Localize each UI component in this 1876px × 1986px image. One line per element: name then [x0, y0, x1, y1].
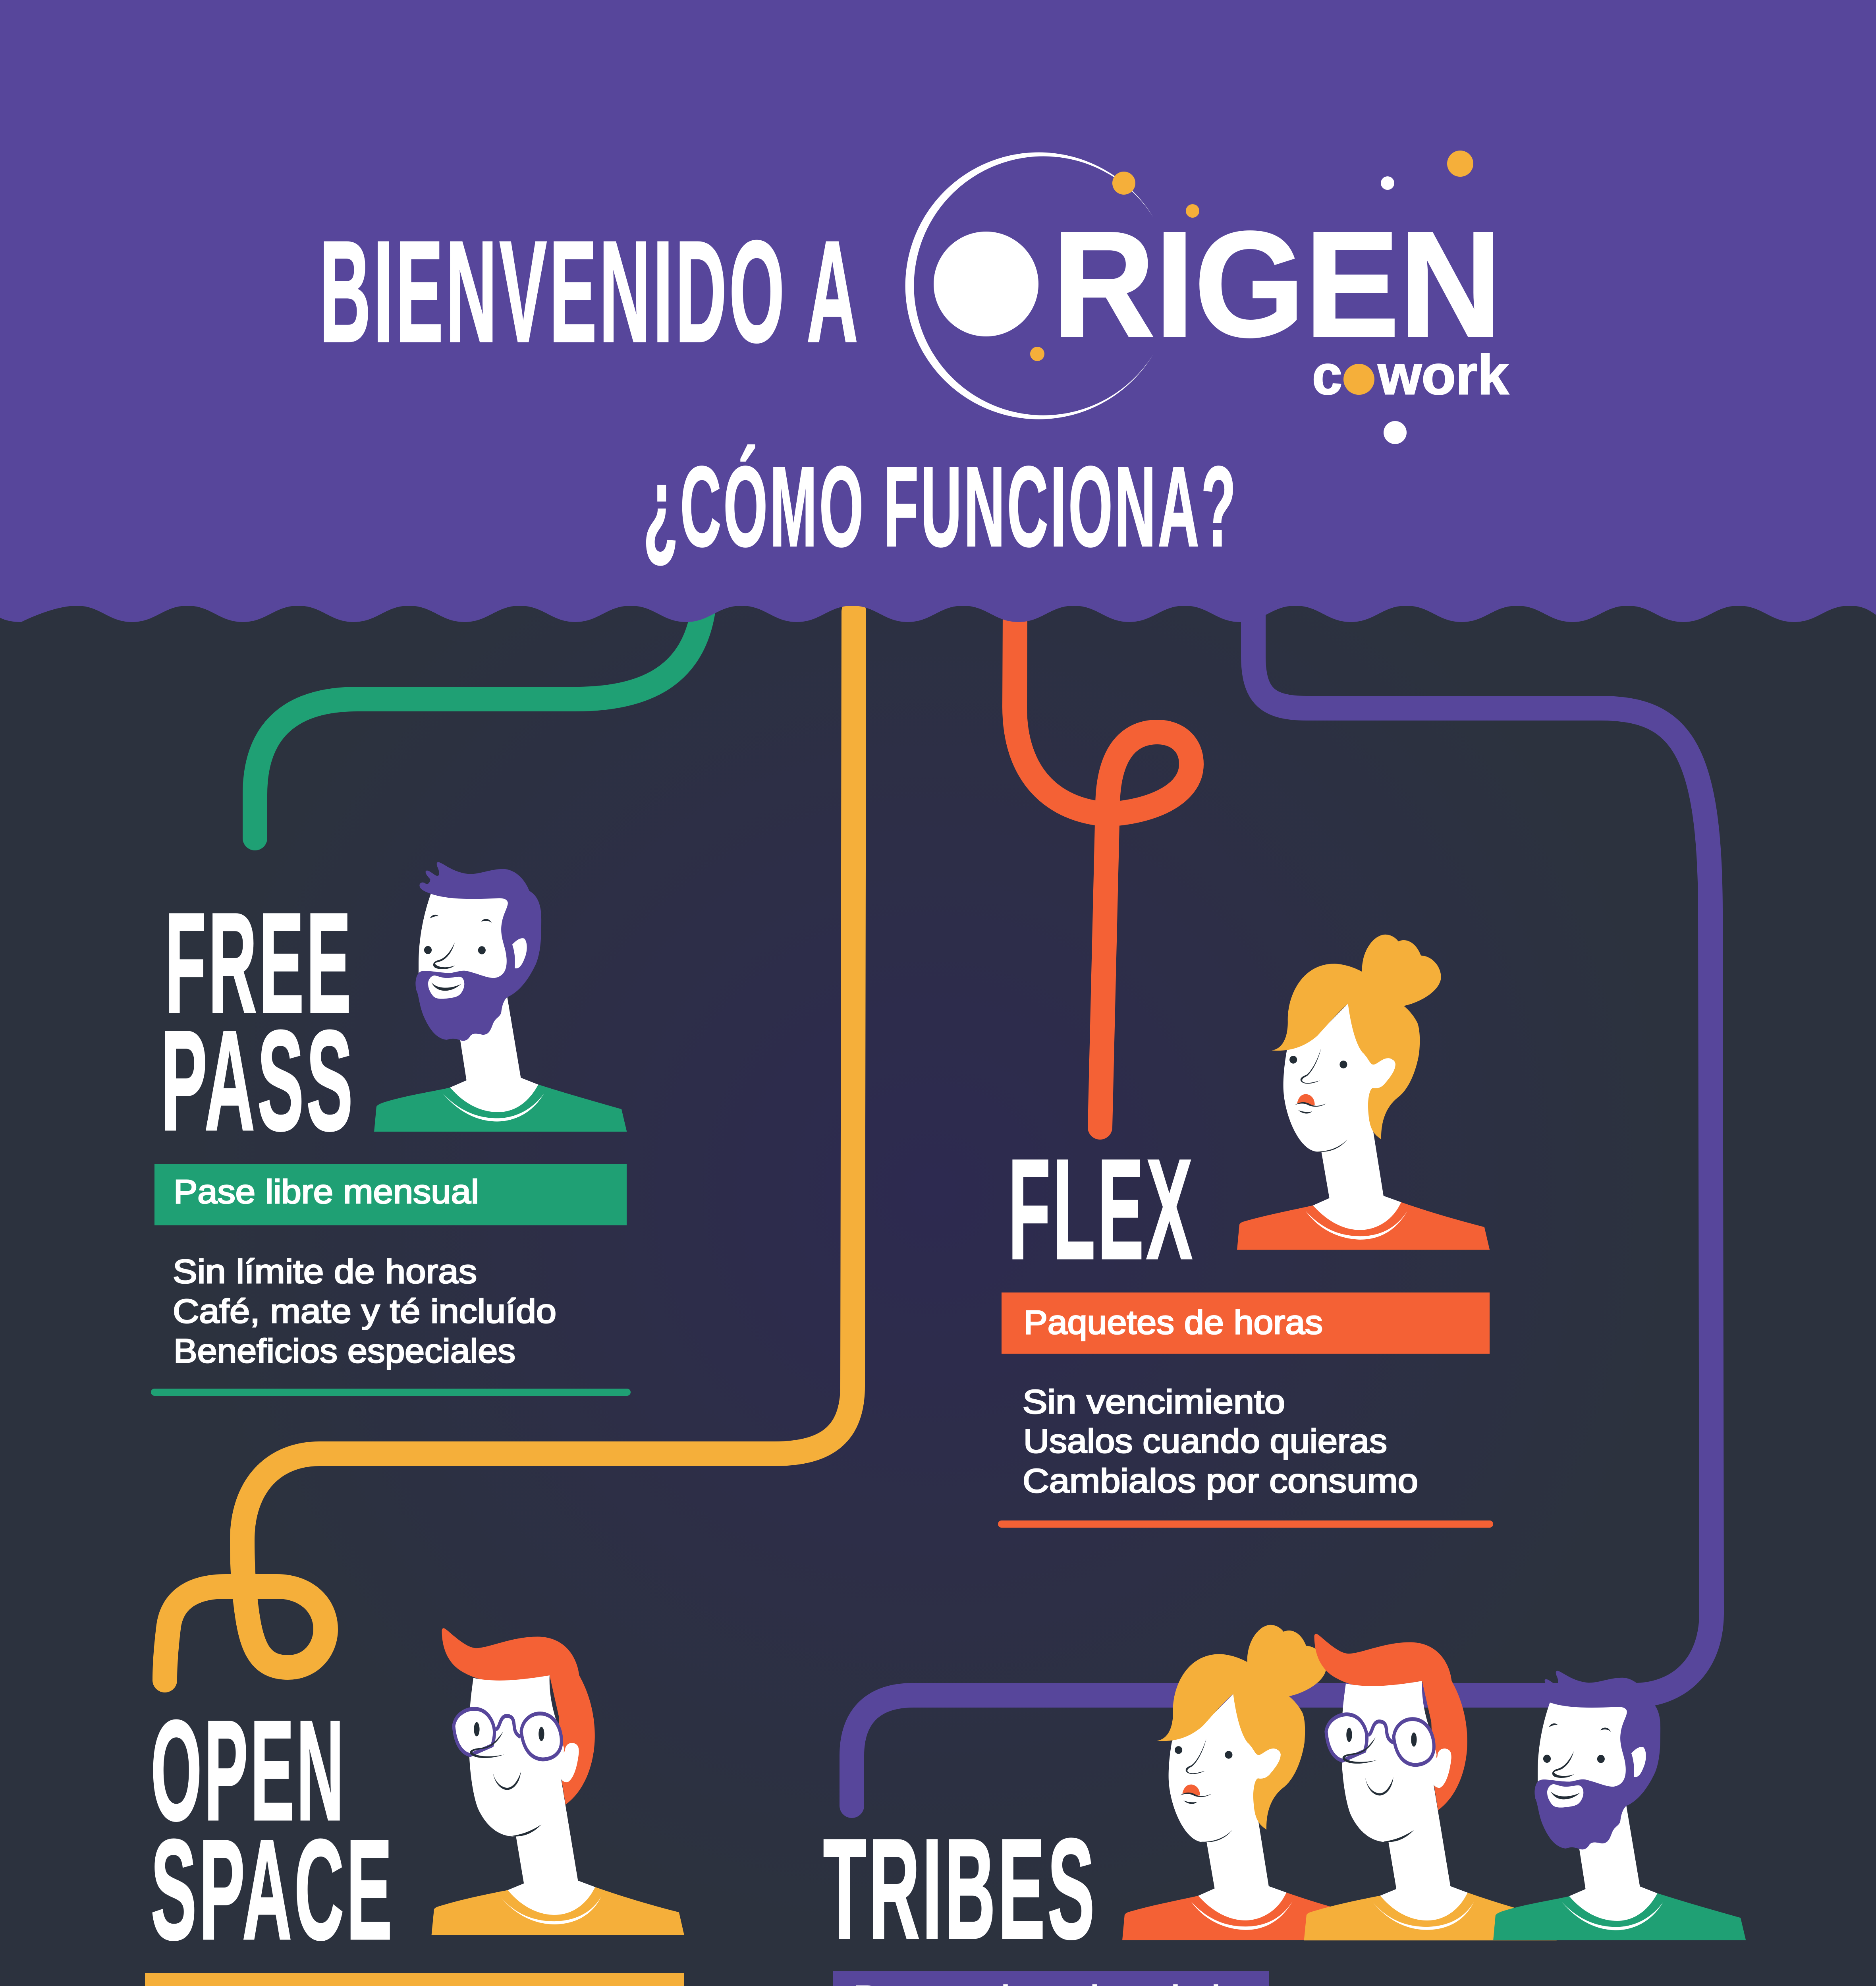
benefits list: Sin vencimiento	[1023, 1383, 1285, 1420]
text: ¿CÓMO FUNCIONA?	[643, 443, 1238, 570]
label bar: paquetes de horas: Paquetes de horas	[1024, 1304, 1323, 1341]
label bar: pase libre mensual	[154, 1164, 627, 1225]
benefits list: Beneficios especiales	[174, 1332, 515, 1370]
panel: flex: FLEX	[1008, 1130, 1195, 1289]
tribes man with glasses	[1304, 1634, 1557, 1940]
pipe: green to free pass	[255, 612, 703, 838]
logo: origen cowork	[905, 151, 1509, 444]
panel: free pass	[151, 862, 631, 1396]
tribes bearded man	[1493, 1671, 1746, 1940]
logo sub wordmark	[1312, 344, 1509, 406]
label bar: paquetes de horas	[1002, 1292, 1490, 1354]
panel: free pass: PASS	[161, 1001, 355, 1160]
logo wordmark: RIGEN	[1052, 201, 1502, 368]
benefits list: Sin límite de horas	[173, 1253, 477, 1290]
logo sub wordmark: work	[1378, 344, 1509, 406]
pipe: yellow to open space	[165, 612, 854, 1680]
benefits list: Café, mate y té incluído	[173, 1292, 556, 1330]
logo ring	[905, 153, 1153, 419]
tribes woman	[1122, 1625, 1375, 1940]
illustration: man with glasses	[432, 1628, 684, 1935]
panel: free pass: FREE	[165, 883, 353, 1042]
rule: orange	[998, 1520, 1493, 1528]
rule: green	[151, 1389, 631, 1396]
benefits list: Usalos cuando quieras	[1023, 1422, 1387, 1460]
label bar: paga por hora	[145, 1973, 684, 1986]
logo big O	[934, 232, 1038, 336]
benefits list: Cambialos por consumo	[1023, 1462, 1418, 1499]
heading: open space	[151, 1691, 395, 1969]
logo planets	[1030, 151, 1473, 444]
connector pipes	[165, 612, 1712, 1806]
panel: tribes: TRIBES	[823, 1809, 1097, 1968]
benefits list	[173, 1253, 556, 1370]
panel: open space: SPACE	[151, 1810, 395, 1969]
pipe: orange to flex	[1015, 612, 1191, 1127]
text: BIENVENIDO A	[320, 211, 861, 372]
label bar: para equipos de trabajo	[833, 1971, 1269, 1986]
illustration: bearded man	[374, 862, 627, 1132]
panel: open space	[141, 1628, 688, 1986]
pipe: purple to tribes	[852, 612, 1712, 1806]
header band with scalloped edge	[0, 0, 1876, 622]
panel: tribes	[823, 1625, 1746, 1986]
logo orange o	[1343, 364, 1374, 395]
heading: free pass	[161, 883, 355, 1160]
heading: open space: OPEN	[151, 1691, 346, 1850]
logo sub wordmark: c	[1312, 344, 1342, 406]
illustration: team of three	[1122, 1625, 1746, 1940]
benefits list	[1023, 1383, 1418, 1499]
panel: flex	[998, 935, 1493, 1528]
illustration: woman with bun	[1237, 935, 1490, 1250]
label bar: pase libre mensual: Pase libre mensual	[174, 1173, 479, 1210]
